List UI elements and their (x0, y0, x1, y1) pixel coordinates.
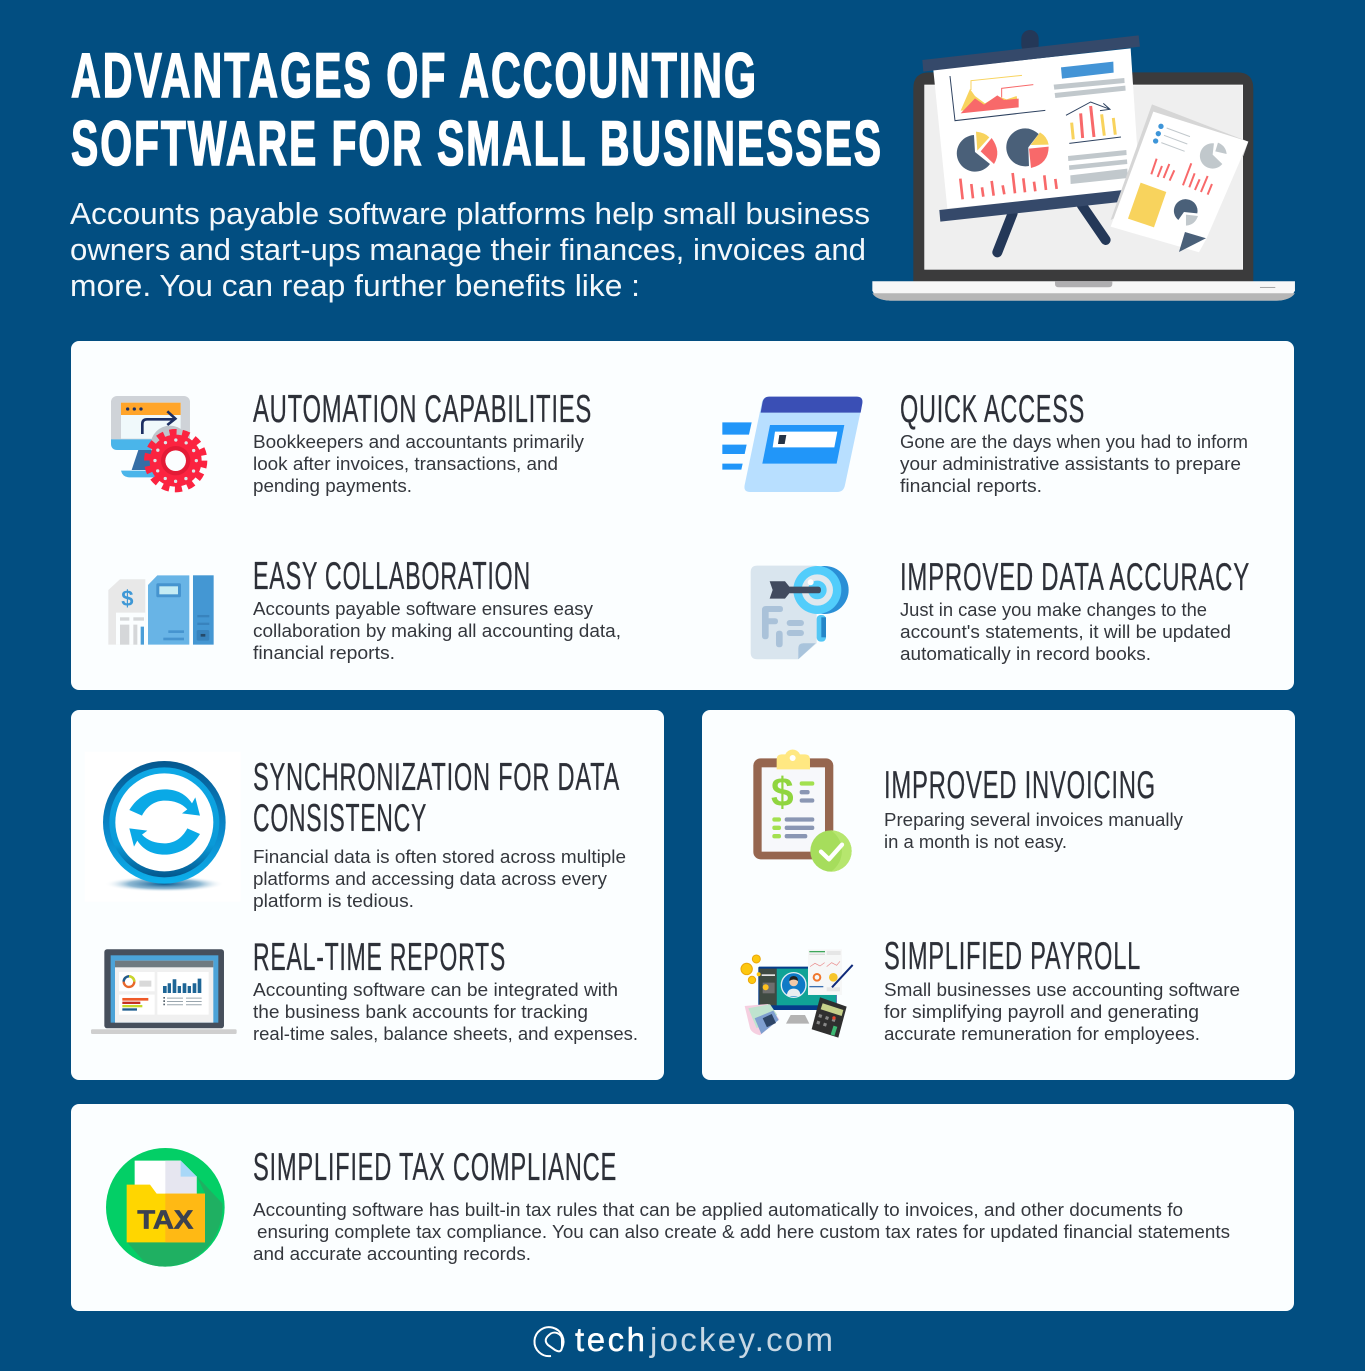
text: synchronization: platforms and accessing data across every (253, 868, 608, 889)
icon: easy collaboration folders: $ (121, 586, 133, 611)
text: simplified payroll (884, 979, 1240, 1044)
icon: invoice clipboard (753, 750, 852, 872)
heading: real-time reports: REAL-TIME REPORTS (253, 936, 506, 979)
icon: easy collaboration folders (108, 575, 214, 645)
text: real-time reports: the business bank accounts for tracking (253, 1001, 588, 1022)
text: real-time reports (253, 979, 638, 1044)
icon: data accuracy target (751, 566, 849, 659)
intro paragraph: Accounts payable software platforms help small business (70, 196, 870, 231)
text: automation capabilities (253, 431, 585, 496)
illustration: laptop with presentation board (872, 30, 1295, 301)
text: quick access: your administrative assistants to prepare (900, 453, 1241, 474)
text: simplified payroll: Small businesses use accounting software (884, 979, 1240, 1000)
text: easy collaboration: financial reports. (253, 642, 395, 663)
text: easy collaboration: Accounts payable software ensures easy (253, 598, 594, 619)
text: real-time reports: real-time sales, balance sheets, and expenses. (253, 1023, 638, 1044)
text: easy collaboration: collaboration by making all accounting data, (253, 620, 621, 641)
heading: synchronization for data consistency: CONSISTENCY (253, 797, 427, 840)
footer logo: techjockey.com (534, 1321, 833, 1358)
text: quick access: Gone are the days when you had to inform (900, 431, 1248, 452)
icon: laptop dashboard (91, 949, 237, 1034)
icon: tax folder (106, 1148, 225, 1267)
panel: synchronization and reports (71, 710, 664, 1080)
text: improved invoicing (884, 809, 1184, 852)
icon: automation monitor and gear (111, 396, 204, 489)
heading: easy collaboration: EASY COLLABORATION (253, 555, 531, 598)
heading: automation capabilities: AUTOMATION CAPABILITIES (253, 388, 592, 431)
text: easy collaboration (253, 598, 621, 663)
title: SOFTWARE FOR SMALL BUSINESSES (71, 109, 883, 179)
title (71, 41, 883, 179)
panel: tax compliance (71, 1104, 1294, 1311)
icon: logo mark (534, 1327, 563, 1356)
text: improved invoicing: Preparing several invoices manually (884, 809, 1184, 830)
text: quick access (900, 431, 1248, 496)
panel: invoicing and payroll (702, 710, 1295, 1080)
text: simplified tax compliance: Accounting software has built-in tax rules that can be applied automatically to invoices, and other documents fo (253, 1199, 1183, 1220)
text: improved data accuracy: Just in case you make changes to the (900, 599, 1207, 620)
text: automation capabilities: look after invoices, transactions, and (253, 453, 558, 474)
text: automation capabilities: pending payments. (253, 475, 412, 496)
heading: synchronization for data consistency (253, 756, 620, 840)
text: synchronization: platform is tedious. (253, 890, 414, 911)
text: simplified payroll: accurate remuneration for employees. (884, 1023, 1200, 1044)
text: simplified tax compliance: ensuring complete tax compliance. You can also create & add here custom tax rates for updated financial statements (257, 1221, 1230, 1242)
heading: simplified tax compliance: SIMPLIFIED TAX COMPLIANCE (253, 1146, 617, 1189)
text: simplified payroll: for simplifying payroll and generating (884, 1001, 1199, 1022)
text: real-time reports: Accounting software can be integrated with (253, 979, 618, 1000)
text: improved data accuracy (900, 599, 1231, 664)
text: automation capabilities: Bookkeepers and accountants primarily (253, 431, 585, 452)
heading: improved invoicing: IMPROVED INVOICING (884, 764, 1156, 807)
title: ADVANTAGES OF ACCOUNTING (71, 41, 758, 111)
text: synchronization: Financial data is often stored across multiple (253, 846, 626, 867)
text: improved invoicing: in a month is not easy. (884, 831, 1067, 852)
text: simplified tax compliance (253, 1199, 1230, 1264)
intro paragraph (70, 196, 870, 303)
text: improved data accuracy: account's statements, it will be updated (900, 621, 1231, 642)
intro paragraph: owners and start-ups manage their finances, invoices and (70, 232, 866, 267)
heading: simplified payroll: SIMPLIFIED PAYROLL (884, 935, 1141, 978)
icon: payroll desk (741, 949, 853, 1038)
heading: synchronization for data consistency: SYNCHRONIZATION FOR DATA (253, 756, 620, 799)
heading: quick access: QUICK ACCESS (900, 388, 1085, 431)
text: synchronization (253, 846, 626, 911)
text: simplified tax compliance: and accurate accounting records. (253, 1243, 531, 1264)
intro paragraph: more. You can reap further benefits like : (70, 268, 640, 303)
text: quick access: financial reports. (900, 475, 1042, 496)
icon: tax folder: TAX (137, 1204, 194, 1234)
panel: top features (71, 341, 1294, 690)
footer logo: techjockey.com: jockey.com (649, 1321, 833, 1358)
footer logo: techjockey.com: tech (575, 1321, 645, 1358)
icon: sync arrows (85, 752, 241, 902)
icon: quick access window (722, 397, 862, 492)
icon: invoice clipboard: $ (771, 769, 794, 815)
text: improved data accuracy: automatically in record books. (900, 643, 1151, 664)
